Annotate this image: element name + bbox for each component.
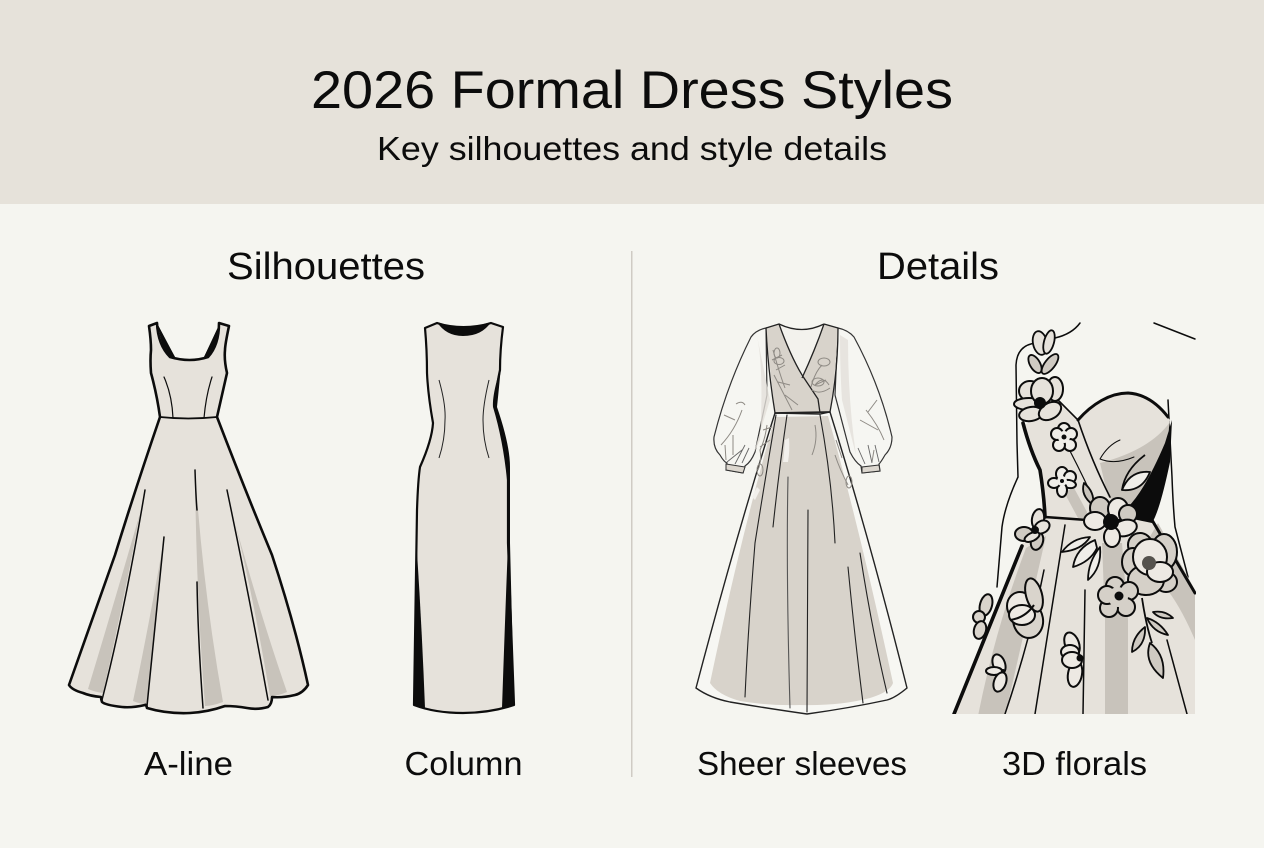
label: 3D florals: 3D florals <box>1002 745 1147 782</box>
dress outline <box>69 323 308 713</box>
leaves <box>1062 455 1173 678</box>
darts <box>439 380 489 458</box>
label: A-line: A-line <box>144 745 233 782</box>
subtitle: Key silhouettes and style details <box>377 130 887 167</box>
illustration: 3D florals dress <box>952 323 1195 716</box>
label: Sheer sleeves: Sheer sleeves <box>697 745 907 782</box>
header band <box>0 0 1264 204</box>
seams and pleats <box>102 377 268 708</box>
floral embroidery <box>721 348 884 488</box>
flower: waist left <box>1015 508 1052 551</box>
flower: shoulder bloom <box>1014 377 1064 424</box>
sleeve gathers <box>727 445 879 464</box>
bodice <box>766 324 838 413</box>
sleeves <box>714 328 767 473</box>
bodice <box>1025 393 1170 520</box>
heading: Details: Details <box>877 246 999 288</box>
title: 2026 Formal Dress Styles <box>311 61 953 120</box>
illustration: A-line dress <box>69 323 308 713</box>
flower: small bodice <box>1051 423 1077 451</box>
heading: Silhouettes: Silhouettes <box>227 246 425 288</box>
illustration: Column dress <box>414 322 514 713</box>
sheer skirt <box>696 412 907 714</box>
flower: rose left skirt <box>1007 577 1046 640</box>
illustration: Sheer sleeves dress <box>696 324 907 714</box>
flower: dark centre lower <box>1098 577 1138 617</box>
label: Column: Column <box>404 745 522 782</box>
skirt shadow stripes <box>978 523 1195 716</box>
arm and shoulder lines <box>997 323 1195 587</box>
flower: peony right <box>1122 533 1177 595</box>
flower: small left edge <box>972 593 995 640</box>
skirt <box>952 517 1195 716</box>
flower: lower left <box>986 653 1009 693</box>
dress outline <box>954 393 1195 714</box>
skirt fold shadows <box>88 470 287 706</box>
flower: shoulder bud <box>1028 329 1060 375</box>
flower: small bodice lower <box>1048 467 1077 497</box>
skirt pleats <box>745 415 887 712</box>
flower: lower centre <box>1061 630 1084 688</box>
black side panels <box>414 322 514 708</box>
skirt under-layer <box>710 416 893 705</box>
flower: central large <box>1084 497 1139 547</box>
